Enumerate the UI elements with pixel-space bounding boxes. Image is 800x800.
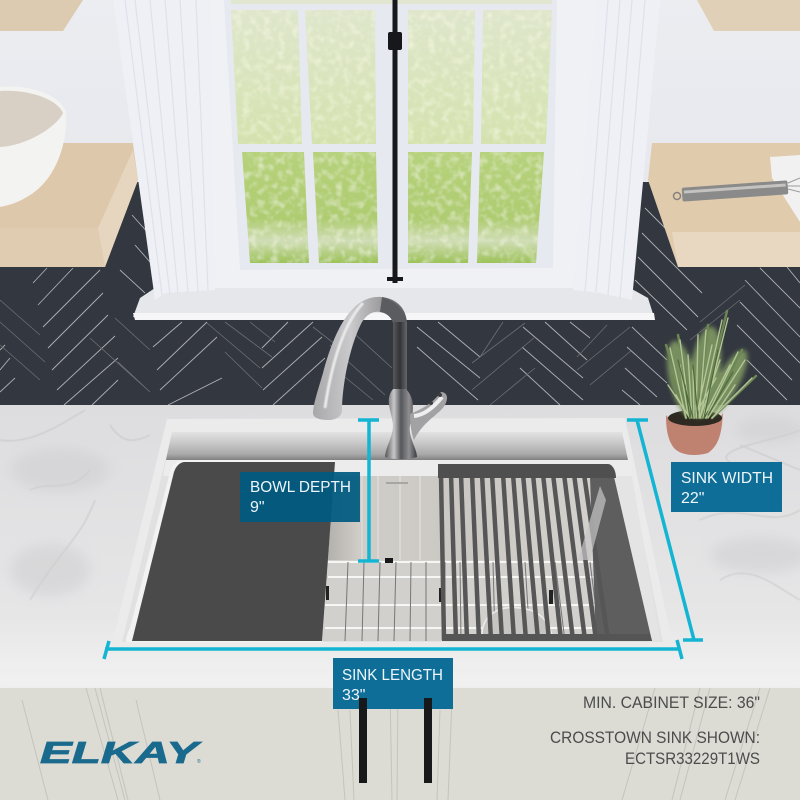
text: model shown xyxy=(550,729,760,768)
wall xyxy=(0,0,800,270)
bowl logo xyxy=(386,482,408,484)
shelf: right with whisk xyxy=(648,143,800,267)
window trim: left xyxy=(113,0,215,300)
dimension: sink length line xyxy=(104,640,682,659)
callout: sink width: SINK WIDTH xyxy=(681,470,773,487)
dimension: sink width line xyxy=(627,420,703,640)
window sill xyxy=(133,288,655,320)
cabinet handles xyxy=(359,698,432,783)
bowl right wall xyxy=(612,476,660,640)
logo: Elkay: ELKAY xyxy=(40,735,203,770)
backsplash: herringbone tile xyxy=(0,182,800,406)
dimension: bowl depth line xyxy=(358,420,379,561)
window trim: right xyxy=(573,0,660,300)
logo: Elkay: ® xyxy=(197,758,201,765)
logo: Elkay xyxy=(40,735,203,770)
bowl back wall xyxy=(325,476,605,562)
callout: sink length xyxy=(333,658,453,709)
plant in terracotta pot xyxy=(661,311,756,455)
cabinet xyxy=(0,688,800,800)
window handle rod xyxy=(387,0,403,283)
cutting board xyxy=(126,460,335,642)
towel xyxy=(770,155,800,222)
shelf: left with bowl xyxy=(0,87,138,267)
icon: whisk handle xyxy=(674,178,800,202)
callout: sink width: 22" xyxy=(681,490,704,507)
window frame xyxy=(205,0,605,292)
faucet handle xyxy=(410,392,447,440)
callout: bowl depth xyxy=(240,472,360,522)
icon: white bowl xyxy=(0,87,66,207)
text: model shown: ECTSR33229T1WS xyxy=(625,750,760,768)
callout: sink length: 33" xyxy=(342,687,365,704)
faucet base xyxy=(385,389,417,459)
callout: bowl depth: 9" xyxy=(250,499,265,516)
text: model shown: CROSSTOWN SINK SHOWN: xyxy=(550,729,760,747)
roll-up drying rack xyxy=(438,464,652,641)
wire rack xyxy=(322,558,640,641)
rear ledge xyxy=(166,432,628,460)
callout: bowl depth: BOWL DEPTH xyxy=(250,479,351,496)
callout: sink width xyxy=(671,462,782,512)
shelf: upper right xyxy=(697,0,800,31)
faucet xyxy=(313,297,447,459)
faucet neck xyxy=(393,322,407,390)
countertop xyxy=(0,405,800,689)
faucet spout xyxy=(313,297,407,420)
callout: sink length: SINK LENGTH xyxy=(342,667,443,684)
shelf: upper left xyxy=(0,0,83,31)
window panes xyxy=(231,10,552,263)
sink deck xyxy=(112,418,672,644)
sink xyxy=(112,418,672,644)
pot xyxy=(666,412,723,455)
foliage xyxy=(661,311,756,420)
text: minimum cabinet size: MIN. CABINET SIZE: 36" xyxy=(583,694,760,712)
